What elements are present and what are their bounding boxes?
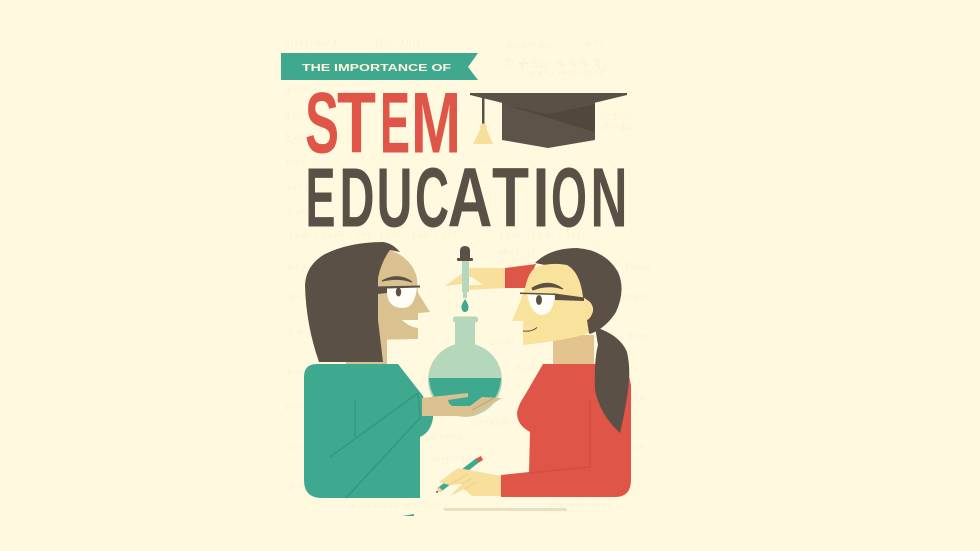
title: STEM: S bbox=[305, 76, 339, 172]
figure: right scientist bbox=[445, 248, 631, 497]
title: EDUCATION: A bbox=[448, 150, 492, 244]
infographic canvas: √b²−4ac bbox=[600, 122, 635, 133]
title: EDUCATION: C bbox=[415, 150, 449, 244]
infographic canvas: ∑x bbox=[633, 392, 645, 403]
dropper bbox=[457, 246, 473, 312]
infographic canvas: 3x+y=1 bbox=[284, 262, 317, 273]
infographic canvas: |x−y|=? bbox=[600, 110, 633, 121]
neck bbox=[346, 330, 387, 366]
infographic canvas: f(x)=x² bbox=[285, 110, 314, 121]
infographic canvas: ∫ s'dx = ∫ x dx = x+C bbox=[289, 230, 374, 241]
infographic canvas: −b±√b²−4ac bbox=[500, 40, 552, 51]
title: STEM: T bbox=[337, 76, 376, 172]
infographic canvas: √x+1 bbox=[287, 182, 309, 193]
infographic canvas: ∑ n+1 bbox=[285, 132, 311, 143]
infographic canvas: ∫ s'dx = ∫ tdx = x+C bbox=[379, 230, 460, 241]
infographic canvas: √x+1 dx bbox=[285, 292, 319, 303]
icon: graduation cap bbox=[470, 93, 627, 148]
banner: the importance of: THE IMPORTANCE OF bbox=[302, 62, 452, 74]
goggles bbox=[527, 294, 554, 315]
infographic canvas: abs(x−y) bbox=[498, 247, 535, 258]
eyebrow bbox=[382, 277, 412, 282]
infographic canvas: sin(x) bbox=[285, 157, 308, 168]
face bbox=[372, 250, 430, 340]
infographic canvas: |x−y|=? bbox=[498, 254, 531, 265]
infographic canvas: ① ✛ 5xc ∿∿∿ X₄ bbox=[500, 57, 606, 72]
title: EDUCATION: E bbox=[306, 150, 336, 244]
infographic canvas: x²+1 bbox=[584, 38, 604, 49]
small teal mark bbox=[402, 514, 414, 516]
title: EDUCATION: D bbox=[340, 150, 374, 244]
banner: the importance of bbox=[281, 53, 478, 80]
title: EDUCATION: N bbox=[590, 150, 628, 244]
hair bbox=[305, 242, 400, 362]
infographic canvas: √x bbox=[633, 442, 643, 453]
hand holding flask bbox=[422, 393, 502, 416]
red sweater bbox=[501, 364, 631, 497]
title: EDUCATION: T bbox=[492, 150, 529, 244]
infographic canvas: √a²+b² bbox=[485, 337, 514, 348]
figure: left scientist bbox=[304, 242, 433, 498]
red sleeve bbox=[505, 264, 536, 288]
face bbox=[512, 264, 593, 345]
infographic canvas: x²+y²=z² bbox=[429, 432, 466, 443]
infographic canvas: ∮ 5xc e^x+1 ⇒ x²=2x+1 bbox=[350, 500, 448, 511]
eye bbox=[536, 295, 542, 305]
teal lab coat bbox=[304, 364, 433, 498]
infographic canvas: ① bbox=[627, 488, 637, 499]
pencil bbox=[436, 458, 482, 493]
arm hand reaching bbox=[445, 268, 505, 290]
infographic canvas: y=ax+b bbox=[286, 367, 319, 378]
eyebrow bbox=[532, 283, 563, 290]
smile bbox=[523, 328, 537, 331]
infographic canvas: x²+1 bbox=[284, 402, 304, 413]
infographic canvas: e^x+1 ⇒ x²=2x+1 bbox=[530, 68, 604, 79]
title: STEM: E bbox=[380, 76, 410, 172]
hair bbox=[535, 248, 622, 334]
eye bbox=[396, 288, 401, 296]
smile bbox=[402, 320, 418, 328]
title: EDUCATION: O bbox=[551, 150, 587, 244]
title: EDUCATION: U bbox=[376, 150, 412, 244]
hand writing bbox=[439, 468, 501, 496]
goggles bbox=[387, 287, 417, 308]
desk shadow bbox=[443, 508, 567, 511]
title: STEM: M bbox=[411, 76, 461, 172]
infographic canvas: ∫ s'dx = ∫ x dx = x+C bbox=[499, 230, 584, 241]
neck bbox=[553, 335, 594, 367]
drop bbox=[461, 299, 469, 312]
title: EDUCATION: I bbox=[532, 150, 550, 244]
infographic canvas: 3x+y²=1−b bbox=[429, 454, 477, 465]
infographic canvas: ∫f(x)=3 f(x) bbox=[374, 38, 420, 49]
title: EDUCATION bbox=[306, 150, 628, 244]
sweater seams bbox=[529, 400, 590, 473]
infographic canvas: F=ma bbox=[624, 262, 650, 273]
infographic canvas: e^x ⇒ x²=2x+1 bbox=[550, 500, 612, 511]
infographic canvas: √b²−4ac bbox=[285, 442, 320, 453]
infographic canvas: a²+b²=c² bbox=[285, 84, 323, 95]
infographic canvas: ① ✛ bbox=[285, 482, 305, 493]
ponytail bbox=[595, 327, 629, 433]
infographic canvas: √(x+y) dx bbox=[470, 417, 510, 428]
infographic canvas: −b±√b²−4ac bbox=[510, 364, 562, 375]
infographic canvas: ① x²+y bbox=[285, 207, 316, 218]
title: STEM bbox=[305, 76, 461, 172]
infographic canvas: abs(x) bbox=[622, 292, 648, 303]
infographic canvas: P=m bbox=[627, 332, 648, 343]
flask bbox=[428, 316, 502, 417]
coat seams bbox=[330, 393, 420, 498]
infographic canvas: ③ x−b bbox=[285, 327, 313, 338]
infographic canvas: √(x+y) dx=3 bbox=[285, 38, 336, 49]
